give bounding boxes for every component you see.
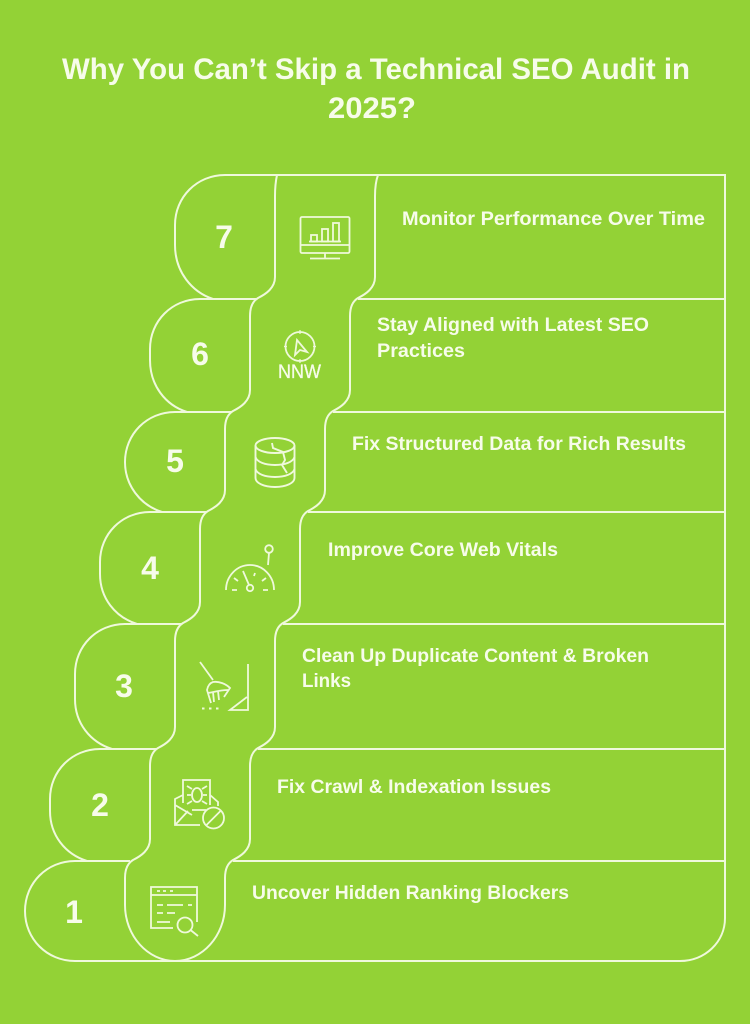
step numbers: 2 <box>91 787 109 823</box>
staircase outlines <box>25 175 725 961</box>
label 6: Practices <box>377 341 465 362</box>
staircase diagram <box>25 175 725 961</box>
label 6 <box>377 315 649 362</box>
icon: bug mail with block sign <box>175 780 224 828</box>
label 3: Clean Up Duplicate Content & Broken <box>302 646 649 667</box>
icon: monitor with bar chart <box>300 217 350 258</box>
title <box>62 53 690 125</box>
icon: compass NNW: NNW <box>278 362 321 383</box>
icon: speed gauge <box>226 545 274 591</box>
title: Why You Can’t Skip a Technical SEO Audit in <box>62 53 690 86</box>
label 3: Links <box>302 671 351 692</box>
label 7: Monitor Performance Over Time <box>402 209 705 230</box>
icon: compass NNW <box>278 330 321 383</box>
label 5: Fix Structured Data for Rich Results <box>352 434 686 455</box>
step numbers: 5 <box>166 443 184 479</box>
step labels <box>252 209 705 904</box>
title: 2025? <box>328 92 416 125</box>
step numbers: 6 <box>191 336 209 372</box>
icon: cracked database <box>256 438 294 487</box>
step numbers: 4 <box>141 550 159 586</box>
label 6: Stay Aligned with Latest SEO <box>377 315 649 336</box>
icon: browser window with magnifier <box>151 887 198 936</box>
label 1: Uncover Hidden Ranking Blockers <box>252 883 569 904</box>
step numbers: 7 <box>215 219 233 255</box>
label 3 <box>302 646 649 692</box>
icon: rake and dustpan <box>200 662 248 710</box>
label 4: Improve Core Web Vitals <box>328 540 558 561</box>
step numbers: 3 <box>115 668 133 704</box>
step numbers: 1 <box>65 894 83 930</box>
step numbers <box>65 219 233 930</box>
label 2: Fix Crawl & Indexation Issues <box>277 777 551 798</box>
